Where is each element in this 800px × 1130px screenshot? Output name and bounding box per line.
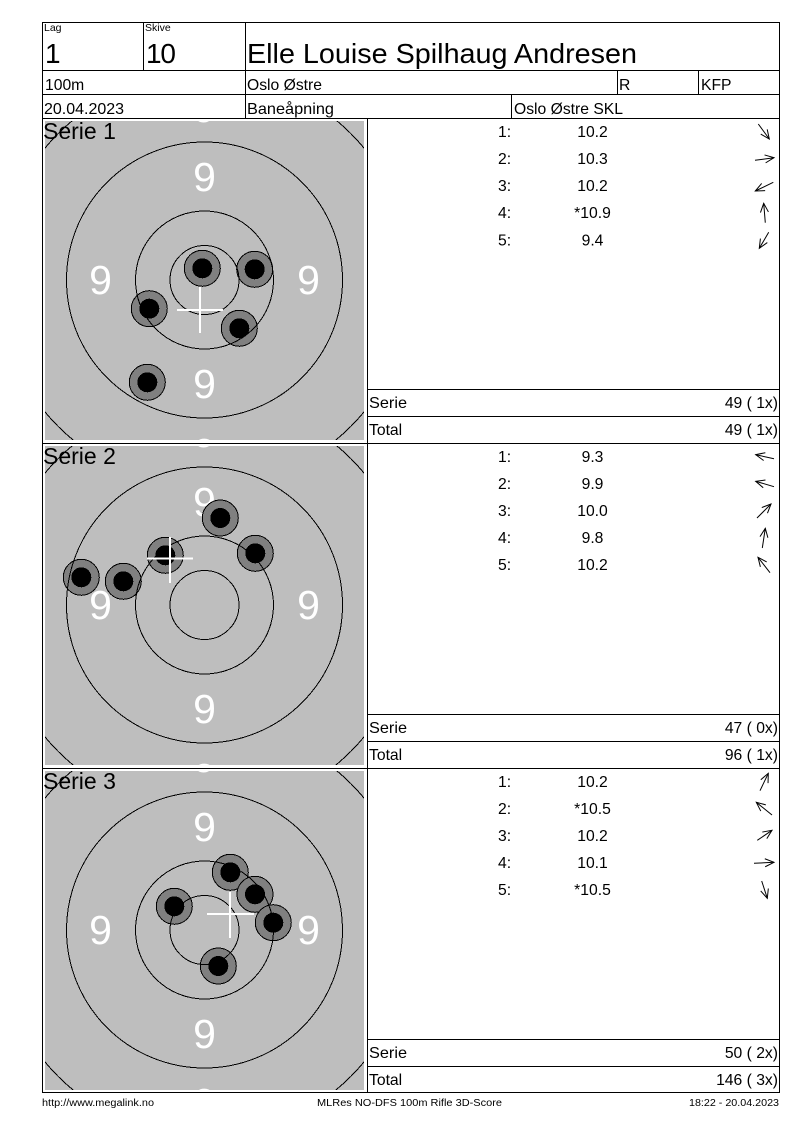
header: event details: 100m (45, 77, 84, 94)
shot list: series 3: *10.5 (574, 882, 611, 899)
shot list: series 3: 10.2 (577, 828, 608, 845)
totals: series 3: 50 ( 2x) (725, 1045, 778, 1062)
header: team and target (44, 22, 176, 69)
totals: series 2: 96 ( 1x) (725, 747, 778, 764)
panel: series 3 target: 9 (193, 1011, 216, 1057)
totals: series 3: Serie (369, 1045, 407, 1062)
header: event details (44, 77, 732, 118)
panel: series 3 target (45, 771, 364, 1090)
totals: series 1 (369, 395, 778, 439)
panel: series 1 target: 9 (193, 430, 216, 476)
panel: series 1 target: 9 (193, 154, 216, 200)
header: event details: R (619, 77, 630, 94)
panel: series 2 target (45, 446, 364, 765)
panel: series 1 target: 9 (297, 257, 320, 303)
shot list: series 2: 10.0 (577, 503, 608, 520)
footer (42, 1098, 779, 1109)
shot list: series 1: 9.4 (582, 232, 604, 250)
header: event details: 20.04.2023 (44, 101, 124, 118)
heading: series 3: Serie 3 (43, 768, 116, 794)
shot list: series 3: 3: (498, 828, 511, 845)
shot list: series 1: 10.2 (577, 124, 608, 141)
shot list: series 1: 5: (498, 232, 511, 250)
panel: series 2 target: 9 (193, 479, 216, 525)
header: event details: Baneåpning (247, 100, 334, 118)
shot list: series 1: 3: (498, 178, 511, 195)
shot list: series 3: *10.5 (574, 801, 611, 818)
panel: series 1 target (45, 121, 364, 440)
shot list: series 3: 5: (498, 882, 511, 899)
panel: series 3 target: 9 (297, 907, 320, 953)
shot list: series 3: 4: (498, 855, 511, 872)
direction arrows: series 3 (754, 773, 774, 898)
direction arrows: series 1 (755, 124, 774, 248)
header: team and target: 10 (146, 38, 176, 69)
panel: series 3 target: 9 (193, 804, 216, 850)
header: event details: KFP (701, 77, 732, 94)
panel: series 2 target: 9 (193, 686, 216, 732)
panel: series 3 target: 9 (193, 735, 216, 781)
totals: series 2 (369, 720, 778, 764)
shot list: series 1: 4: (498, 205, 511, 222)
shot list: series 1: 10.3 (577, 151, 608, 168)
heading: series 1: Serie 1 (43, 118, 116, 144)
header: event details: Oslo Østre (247, 77, 322, 94)
shot list: series 1: 10.2 (577, 178, 608, 195)
totals: series 2: Serie (369, 720, 407, 737)
shot list: series 1: 2: (498, 151, 511, 168)
footer: MLRes NO-DFS 100m Rifle 3D-Score (317, 1098, 502, 1109)
panel: series 2 target: 9 (297, 582, 320, 628)
shot list: series 3 (498, 774, 611, 899)
totals: series 2: 47 ( 0x) (725, 720, 778, 737)
panel: series 2 target: 9 (89, 582, 112, 628)
panel: series 1 target: 9 (193, 361, 216, 407)
shot list: series 3: 2: (498, 801, 511, 818)
heading: series 2: Serie 2 (43, 443, 116, 469)
shot list: series 2: 9.3 (582, 449, 604, 466)
header: team and target: 1 (45, 38, 61, 69)
shot list: series 2: 9.8 (582, 530, 604, 547)
shot list: series 2: 5: (498, 557, 511, 574)
title: shooter name: Elle Louise Spilhaug Andresen (247, 38, 637, 69)
shot list: series 3: 1: (498, 774, 511, 791)
footer: http://www.megalink.no (42, 1098, 154, 1109)
panel: series 1 target: 9 (193, 85, 216, 131)
totals: series 3 (369, 1045, 778, 1089)
totals: series 1: 49 ( 1x) (725, 422, 778, 439)
totals: series 3: Total (369, 1072, 402, 1089)
header: team and target: Lag (44, 22, 62, 34)
shot list: series 3: 10.1 (577, 855, 608, 872)
shot list: series 1: 1: (498, 124, 511, 141)
totals: series 1: 49 ( 1x) (725, 395, 778, 412)
header: team and target: Skive (145, 22, 171, 34)
totals: series 1: Total (369, 422, 402, 439)
panel: series 3 target: 9 (193, 1080, 216, 1126)
shot list: series 2: 10.2 (577, 557, 608, 574)
header: event details: Oslo Østre SKL (514, 101, 623, 118)
shot list: series 1: *10.9 (574, 205, 611, 222)
panel: series 3 target: 9 (89, 907, 112, 953)
direction arrows: series 2 (756, 455, 774, 573)
totals: series 2: Total (369, 747, 402, 764)
totals: series 1: Serie (369, 395, 407, 412)
shot list: series 2: 1: (498, 449, 511, 466)
panel: series 1 target: 9 (89, 257, 112, 303)
shot list: series 2: 9.9 (582, 476, 603, 493)
panel: series 2 target: 9 (193, 410, 216, 456)
totals: series 3: 146 ( 3x) (716, 1072, 778, 1089)
shot list: series 2: 4: (498, 530, 511, 547)
shot list: series 2: 3: (498, 503, 511, 520)
panel: series 2 target: 9 (193, 755, 216, 801)
shot list: series 1 (498, 124, 611, 250)
shot list: series 2: 2: (498, 476, 511, 493)
shot list: series 2 (498, 449, 608, 574)
footer: 18:22 - 20.04.2023 (689, 1098, 779, 1109)
shot list: series 3: 10.2 (577, 774, 608, 791)
